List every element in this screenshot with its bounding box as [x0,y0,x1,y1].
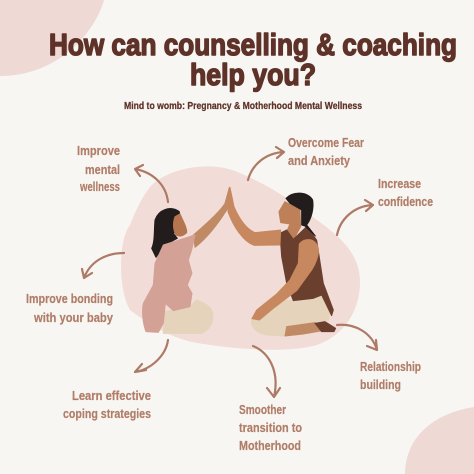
title: help you? [190,58,316,92]
label: increase confidence [378,177,433,209]
mother: hair [152,209,181,257]
corner blob: bottom right [405,407,474,474]
partner: foot [315,322,336,332]
label: improve mental wellness: Improve [77,144,120,158]
label: increase confidence: Increase [378,177,421,191]
partner: pants [251,295,330,336]
label: smoother transition: Motherhood [239,439,301,453]
partner: front arm [252,240,318,320]
partner: hair [286,193,315,236]
label: learn coping strategies: coping strategies [63,407,151,421]
partner: shin [285,323,323,336]
mother: top [143,235,195,332]
partner: neck and face [279,202,301,240]
partner: torso [280,227,333,316]
title [49,28,457,92]
label: improve mental wellness [77,144,120,194]
arrow: relationship building [337,325,377,350]
arrow: improve mental wellness [135,165,168,202]
mother: raised arm [193,187,231,247]
label: improve mental wellness: mental [85,163,120,177]
label: relationship building [360,360,421,392]
label: improve bonding [26,292,113,325]
label: increase confidence: confidence [378,195,433,209]
label: improve mental wellness: wellness [79,180,120,194]
arrow: increase confidence [337,200,373,235]
subtitle: Mind to womb: Pregnancy & Motherhood Mental Wellness [124,100,362,112]
arrow: overcome fear [248,147,284,180]
arrow: coping strategies [135,340,168,372]
label: improve bonding: Improve bonding [26,292,113,306]
label: smoother transition: Smoother [239,403,286,417]
arrow: smoother transition [253,346,280,397]
mother: face [174,214,187,236]
label: improve bonding: with your baby [33,311,113,325]
central blob [121,166,360,350]
arrow: improve bonding [82,253,124,278]
partner: raised arm [228,187,281,245]
mother: trousers [163,300,213,333]
label: learn coping strategies [63,389,151,421]
label: overcome fear and anxiety [288,136,364,168]
label: smoother transition: transition to [239,421,302,435]
label: smoother transition [239,403,302,453]
corner blob: top left [0,0,104,76]
label: relationship building: Relationship [360,360,421,374]
label: learn coping strategies: Learn effective [72,389,151,403]
label: relationship building: building [360,378,401,392]
label: overcome fear and anxiety: Overcome Fear [288,136,364,150]
label: overcome fear and anxiety: and Anxiety [288,154,350,168]
illustration: high five figures [143,187,336,336]
